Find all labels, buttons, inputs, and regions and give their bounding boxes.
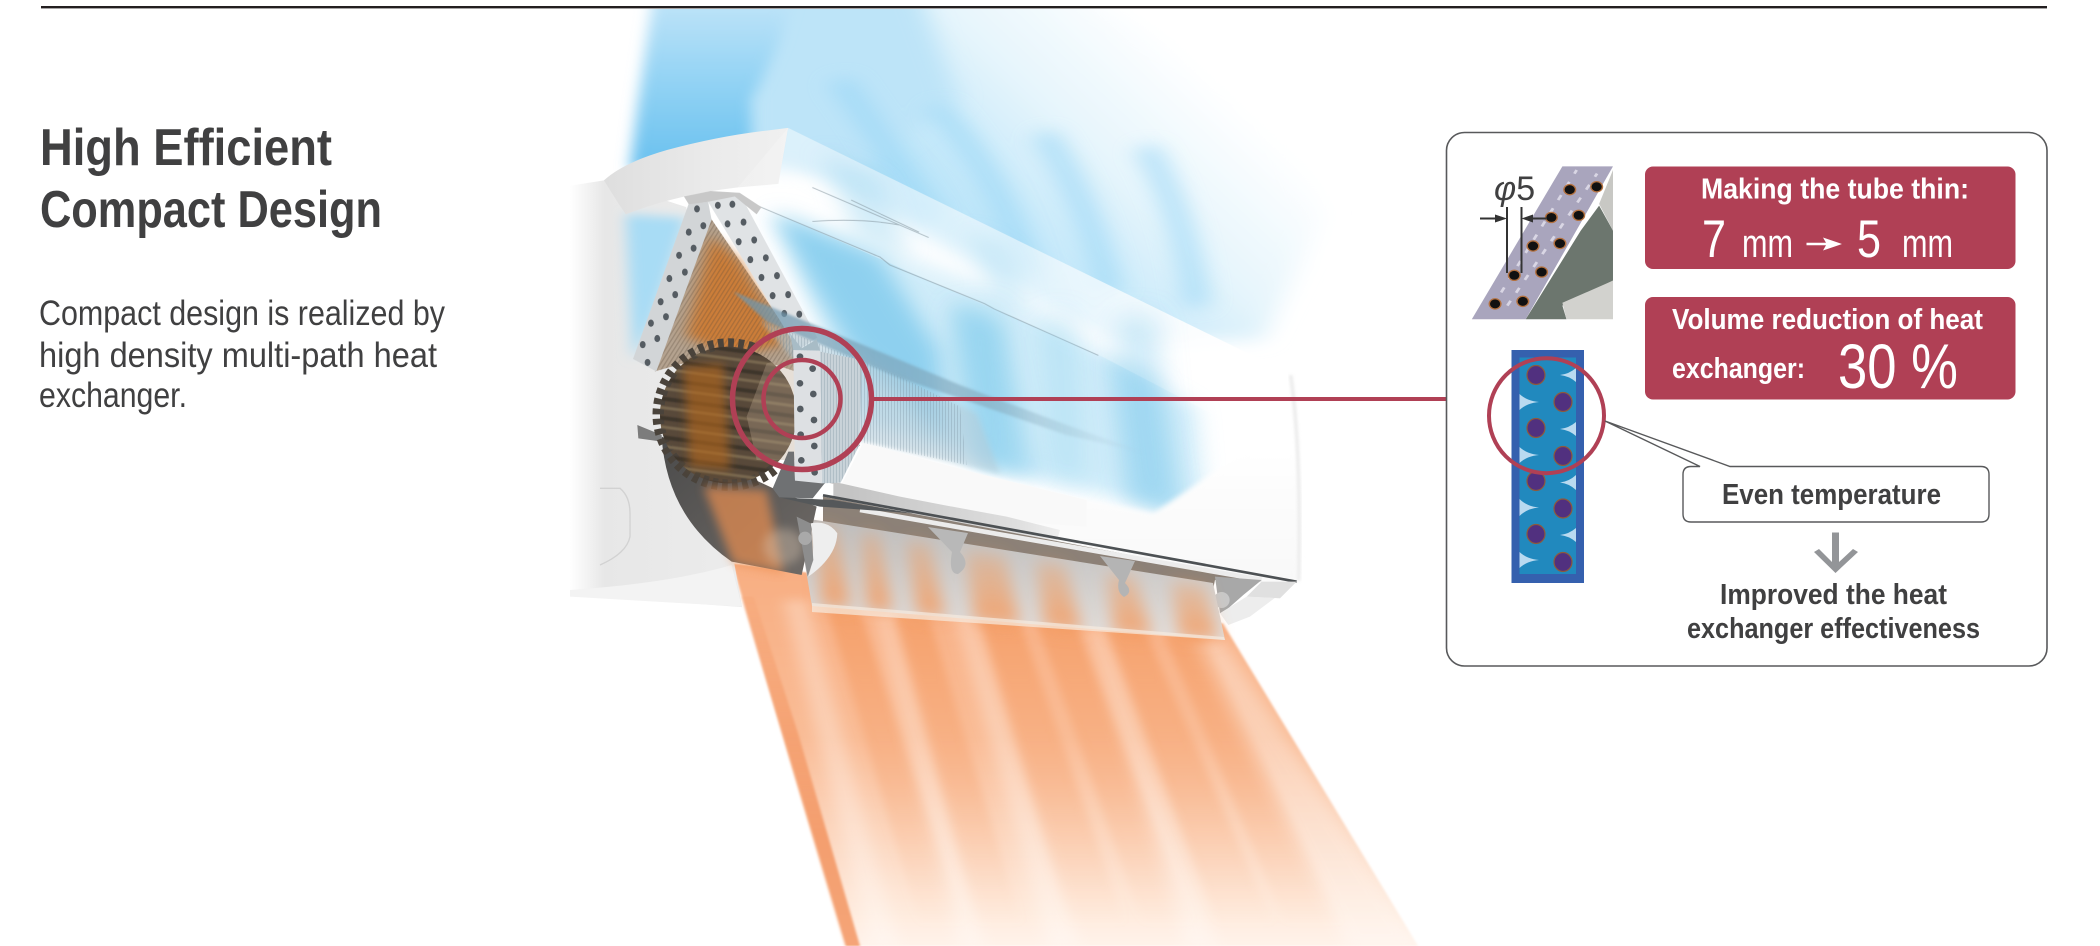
flap bottom edge highlight — [812, 603, 1225, 640]
callout: even temperature: Even temperature — [1722, 479, 1941, 511]
conclusion text — [1687, 579, 1980, 645]
bottom right corner shell — [1220, 582, 1297, 625]
conclusion text: exchanger effectiveness — [1687, 613, 1980, 645]
red box: making the tube thin: 7 — [1702, 210, 1726, 269]
exchanger shadow band — [733, 292, 1147, 453]
tube diameter label: φ5 — [1494, 170, 1535, 208]
unit right edge shade — [1291, 375, 1299, 581]
wall lower lighter band — [570, 565, 742, 607]
left outer panel outline — [600, 488, 630, 565]
title: High Efficient Compact Design: Compact Design — [40, 181, 382, 239]
callout: even temperature — [1605, 421, 1989, 522]
middle louver hook — [928, 527, 968, 574]
bracket side — [797, 517, 813, 577]
outlet recess — [823, 497, 1262, 588]
tube diameter dimension lines — [1480, 207, 1547, 273]
blue air seen through the panel — [774, 150, 1181, 514]
red magnifier circle: small — [764, 360, 840, 438]
hot air left edge strip — [741, 597, 860, 946]
cover edge lines — [757, 187, 1098, 355]
air conditioner unit: louver flap — [797, 517, 1225, 640]
exchanger tip — [790, 333, 820, 351]
body seam dark — [823, 495, 1297, 582]
right perforated strip — [708, 194, 817, 350]
connector line to detail panel — [873, 397, 1447, 401]
crisp top edge of white body — [833, 443, 1087, 527]
unit left side wall — [570, 180, 742, 607]
exchanger fins side — [820, 352, 862, 483]
heat exchanger triangle interior — [655, 214, 798, 371]
fin area — [760, 320, 1000, 473]
red box: volume reduction: exchanger: — [1672, 353, 1805, 385]
top rule — [41, 6, 2047, 8]
hot air flow blowing out of the unit (orange) — [732, 563, 1421, 946]
white rail — [860, 510, 1262, 580]
triangle fin stripes — [655, 214, 798, 371]
fin stripes — [760, 320, 967, 465]
front panel veil — [735, 128, 1299, 580]
red box: volume reduction — [1645, 297, 2016, 402]
fan inner lighter area — [747, 357, 795, 460]
orange heat glow in the triangle — [686, 236, 788, 357]
photo of thin tube fins — [1472, 166, 1613, 319]
grey down arrow — [1814, 532, 1858, 573]
bracket bolt — [798, 532, 812, 545]
air conditioner unit: fan and housing — [570, 333, 913, 607]
red box: making the tube thin: mm — [1902, 222, 1953, 266]
red box: volume reduction: Volume reduction of heat — [1672, 304, 1983, 336]
fan mounting tab — [637, 425, 662, 442]
pale streaks — [784, 600, 1421, 946]
red box: volume reduction: 30 % — [1838, 332, 1958, 402]
vertical strip holes — [797, 353, 818, 476]
vertical perforated strip — [793, 350, 822, 483]
conclusion text: Improved the heat — [1720, 579, 1947, 611]
title: High Efficient Compact Design — [40, 119, 382, 239]
left perforated strip — [633, 202, 712, 371]
white lower body — [833, 375, 1300, 582]
blue air inside the left side — [626, 214, 686, 361]
orange air through the flap — [815, 525, 1218, 640]
orange streaks — [827, 607, 1346, 933]
exchanger bottom tray — [773, 443, 860, 498]
description text — [39, 294, 445, 415]
description text: high density multi-path heat — [39, 336, 437, 375]
scroll housing — [662, 437, 817, 575]
rating label — [1247, 582, 1297, 598]
pale patch on housing — [763, 528, 803, 565]
red magnifier circle: large — [732, 328, 872, 470]
grey lower band — [833, 482, 1060, 542]
small arrow: 7 to 5 — [1806, 238, 1842, 250]
red box: making the tube thin: mm — [1742, 222, 1793, 266]
fan — [653, 339, 807, 495]
red box: making the tube thin: Making the tube thin: — [1701, 174, 1969, 206]
title: High Efficient Compact Design: High Efficient — [40, 119, 332, 177]
orange glow through fan — [683, 363, 730, 470]
air conditioner unit cutaway: upper part — [570, 128, 1299, 607]
description text: exchanger. — [39, 376, 187, 415]
red magnifier circle on diagram — [1489, 358, 1604, 473]
exchanger holes on slanted strips — [640, 201, 802, 366]
red box: making the tube thin — [1645, 166, 2016, 269]
top corner cap — [604, 128, 788, 214]
air conditioner unit: white lower body and outlet — [733, 292, 1300, 625]
blue bands across front — [953, 310, 1173, 507]
detail panel — [1446, 132, 2047, 666]
red box: making the tube thin: 5 — [1857, 210, 1881, 269]
tube cross-section diagram — [1512, 350, 1584, 583]
pale blue base behind the panel — [774, 207, 1205, 518]
right louver hook — [1100, 556, 1135, 597]
end cap knob — [1214, 592, 1230, 608]
left louver bracket — [808, 523, 837, 577]
cold air flow drawn into the unit (blue) — [630, 0, 1324, 340]
hot air rising through housing — [703, 487, 783, 573]
translucent upper cover band — [754, 128, 1295, 457]
right end cap — [1215, 577, 1262, 613]
strip top clip — [684, 191, 761, 214]
description text: Compact design is realized by — [39, 294, 445, 333]
tray lower dark rail — [779, 497, 913, 513]
